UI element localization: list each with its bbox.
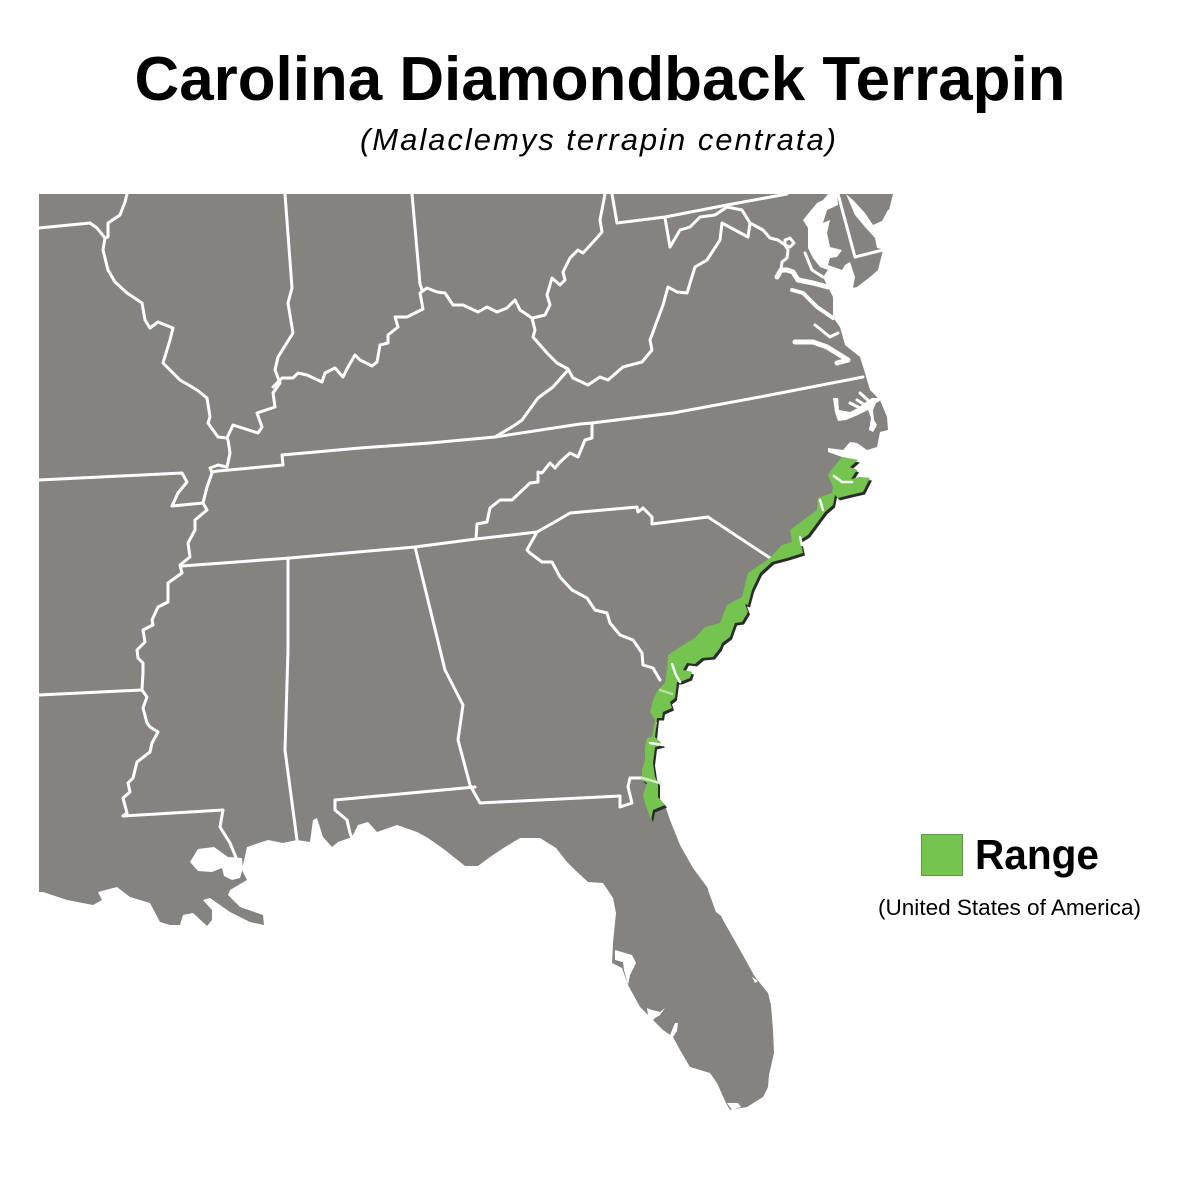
legend bbox=[878, 831, 1141, 920]
water: bays and sounds bbox=[190, 194, 900, 1110]
land mass bbox=[39, 194, 893, 1110]
rivers and state borders bbox=[39, 194, 883, 860]
legend label: Range bbox=[975, 831, 1099, 878]
map: southeastern United States bbox=[39, 194, 900, 1110]
range: green coastal area bbox=[642, 457, 870, 820]
legend note: (United States of America) bbox=[878, 895, 1141, 920]
range inlets bbox=[642, 476, 852, 783]
subtitle: (Malaclemys terrapin centrata) bbox=[360, 122, 836, 157]
range: coastal shadow bbox=[644, 460, 872, 822]
legend swatch bbox=[922, 834, 962, 876]
title: Carolina Diamondback Terrapin bbox=[134, 45, 1066, 114]
